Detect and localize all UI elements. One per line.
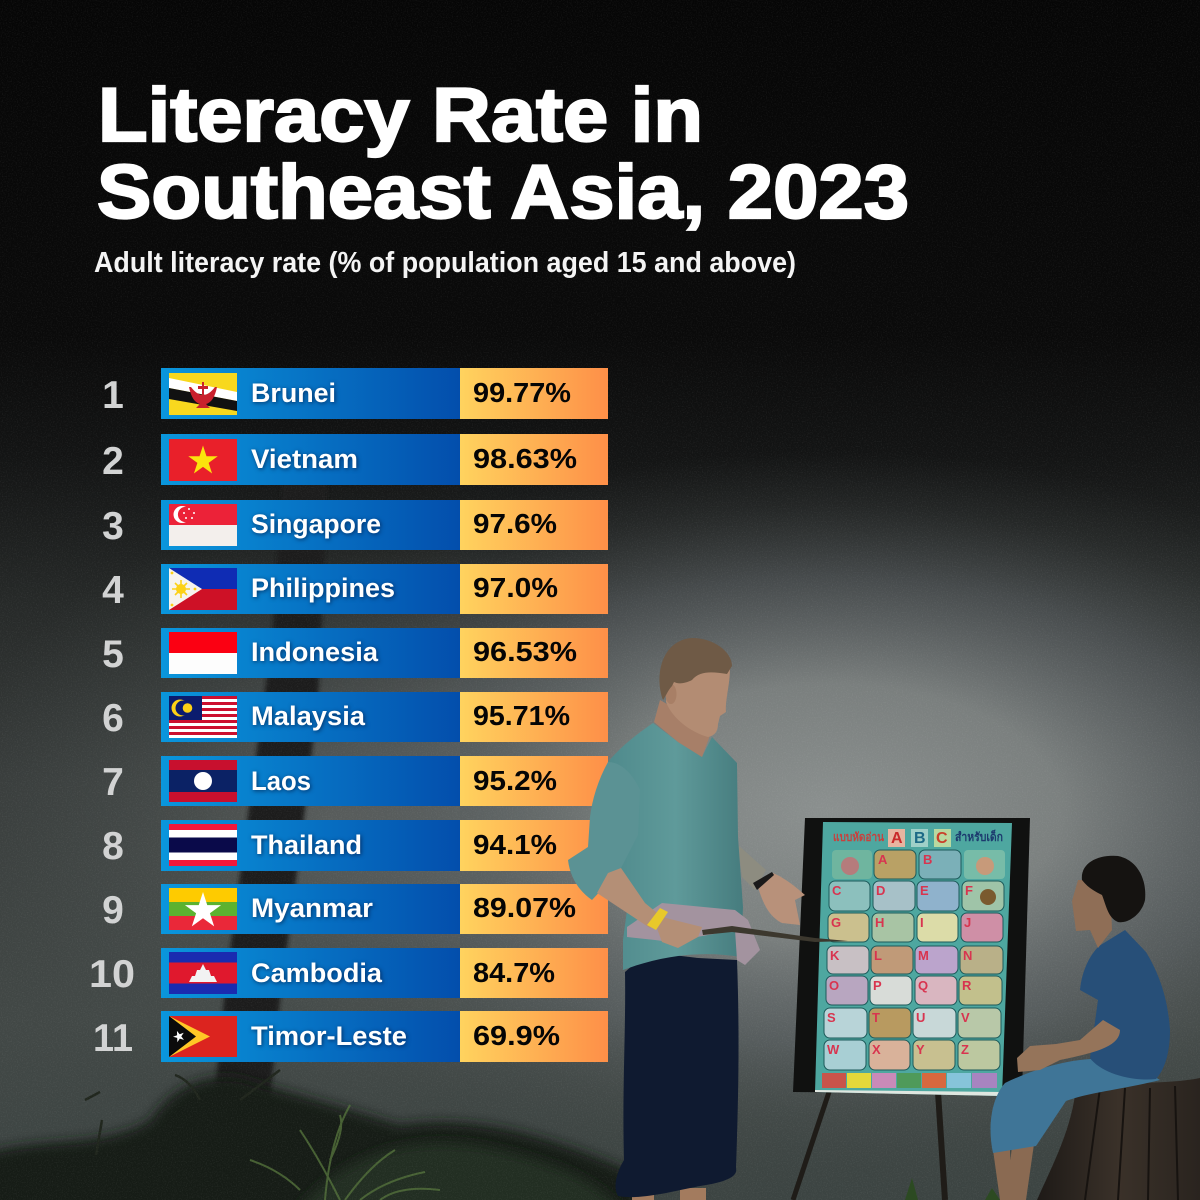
ear [666, 684, 676, 704]
poster letter cells: F [965, 883, 973, 898]
boy sitting [991, 856, 1200, 1200]
poster heading: C [936, 830, 948, 847]
row 5: Indonesia: 96.53% [473, 636, 577, 667]
row 11: Timor-Leste: Timor-Leste [251, 1021, 407, 1051]
poster letter cells: R [962, 978, 972, 993]
shirt [608, 723, 743, 970]
row 6: Malaysia [102, 692, 608, 742]
row 6: Malaysia: 95.71% [473, 700, 570, 731]
poster letter cells: J [964, 915, 971, 930]
poster heading: แบบหัดอ่าน [833, 830, 885, 844]
row 4: Philippines [102, 564, 608, 614]
rolled sleeve [568, 762, 640, 900]
row 2: Vietnam: 98.63% [473, 443, 577, 474]
row 9: Myanmar: 9 [102, 889, 124, 932]
poster letter cells: Z [961, 1042, 969, 1057]
row 5: Indonesia: Indonesia [251, 637, 379, 667]
poster letter cells: Q [918, 978, 928, 993]
row 3: Singapore [102, 500, 608, 550]
right hand [758, 873, 805, 925]
row 7: Laos: 7 [102, 761, 124, 804]
hair [660, 638, 732, 700]
poster letter cells: P [873, 978, 882, 993]
lower legs [993, 1144, 1034, 1200]
row 9: Myanmar [102, 884, 608, 934]
poster letter cells: Y [916, 1042, 925, 1057]
row 1: Brunei: 1 [102, 374, 124, 417]
arm and hands [1017, 1020, 1120, 1072]
poster letter cells: N [963, 948, 972, 963]
poster day strip [822, 1073, 997, 1088]
poster letter cells [824, 850, 1005, 1070]
poster letter cells: S [827, 1010, 836, 1025]
poster letter cells: T [872, 1010, 880, 1025]
poster letter cells: B [923, 852, 932, 867]
poster heading: A [891, 830, 903, 847]
row 2: Vietnam [102, 434, 608, 485]
row 6: Malaysia: 6 [102, 697, 124, 740]
sash [627, 903, 760, 965]
neck [654, 700, 712, 757]
poster letter cells: H [875, 915, 884, 930]
left hand [655, 917, 702, 948]
left forearm [597, 868, 662, 928]
feet [632, 1188, 706, 1200]
row 1: Brunei [102, 368, 608, 419]
row 4: Philippines: 4 [102, 569, 124, 612]
row 11: Timor-Leste: 11 [93, 1017, 133, 1060]
poster letter cells: M [918, 948, 929, 963]
row 8: Thailand: Thailand [251, 830, 362, 860]
title [97, 73, 909, 235]
row 3: Singapore: 3 [102, 505, 124, 548]
title: Literacy Rate in [98, 73, 703, 158]
row 1: Brunei: 99.77% [473, 377, 571, 408]
row 8: Thailand: 8 [102, 825, 124, 868]
row 10: Cambodia: Cambodia [251, 958, 383, 988]
row 2: Vietnam: 2 [102, 440, 124, 483]
row 8: Thailand [102, 820, 608, 871]
row 10: Cambodia: 84.7% [473, 957, 555, 988]
subtitle: Adult literacy rate (% of population aged 15 and above) [94, 247, 796, 279]
wrist band [753, 872, 774, 890]
right forearm [738, 845, 766, 890]
row 10: Cambodia [89, 948, 608, 998]
title: Southeast Asia, 2023 [97, 150, 909, 235]
poster heading: B [914, 830, 926, 847]
jeans [991, 1059, 1160, 1153]
poster letter cells: D [876, 883, 885, 898]
hair [1082, 856, 1145, 922]
row 8: Thailand: 94.1% [473, 829, 557, 860]
pointing stick [702, 926, 848, 942]
row 2: Vietnam: Vietnam [251, 444, 358, 474]
ranking table [89, 368, 608, 1062]
row 7: Laos: Laos [251, 766, 311, 796]
row 9: Myanmar: 89.07% [473, 892, 576, 923]
shirt [1080, 930, 1170, 1080]
poster letter cells: V [961, 1010, 970, 1025]
poster heading [833, 829, 1003, 847]
poster letter cells: O [829, 978, 839, 993]
alphabet poster on black board [793, 818, 1030, 1096]
poster letter cells: A [878, 852, 888, 867]
row 6: Malaysia: Malaysia [251, 701, 366, 731]
poster letter cells: L [874, 948, 882, 963]
tree stump [1037, 1078, 1200, 1200]
row 5: Indonesia [102, 628, 608, 678]
row 11: Timor-Leste [93, 1011, 608, 1062]
yellow wristbands [647, 908, 668, 930]
row 1: Brunei: Brunei [251, 378, 336, 408]
face [666, 668, 730, 737]
row 11: Timor-Leste: 69.9% [473, 1020, 560, 1051]
poster letter cells: G [831, 915, 841, 930]
row 7: Laos [102, 756, 608, 806]
row 9: Myanmar: Myanmar [251, 893, 374, 923]
grass in foreground [905, 1178, 1000, 1200]
row 10: Cambodia: 10 [89, 953, 135, 996]
row 3: Singapore: Singapore [251, 509, 381, 539]
neck and face [1072, 880, 1112, 948]
poster letter cells: I [920, 915, 924, 930]
poster letter cells: X [872, 1042, 881, 1057]
poster letter cells: E [920, 883, 929, 898]
row 7: Laos: 95.2% [473, 765, 557, 796]
row 5: Indonesia: 5 [102, 633, 124, 676]
poster heading: สำหรับเด็ก [955, 829, 1003, 844]
row 4: Philippines: 97.0% [473, 572, 558, 603]
man teaching [568, 638, 848, 1200]
easel legs [793, 1092, 945, 1200]
row 3: Singapore: 97.6% [473, 508, 557, 539]
poster letter cells: U [916, 1010, 925, 1025]
poster letter cells: W [827, 1042, 840, 1057]
row 4: Philippines: Philippines [251, 573, 395, 603]
poster letter cells: C [832, 883, 842, 898]
poster letter cells: K [830, 948, 840, 963]
trousers [616, 952, 739, 1197]
